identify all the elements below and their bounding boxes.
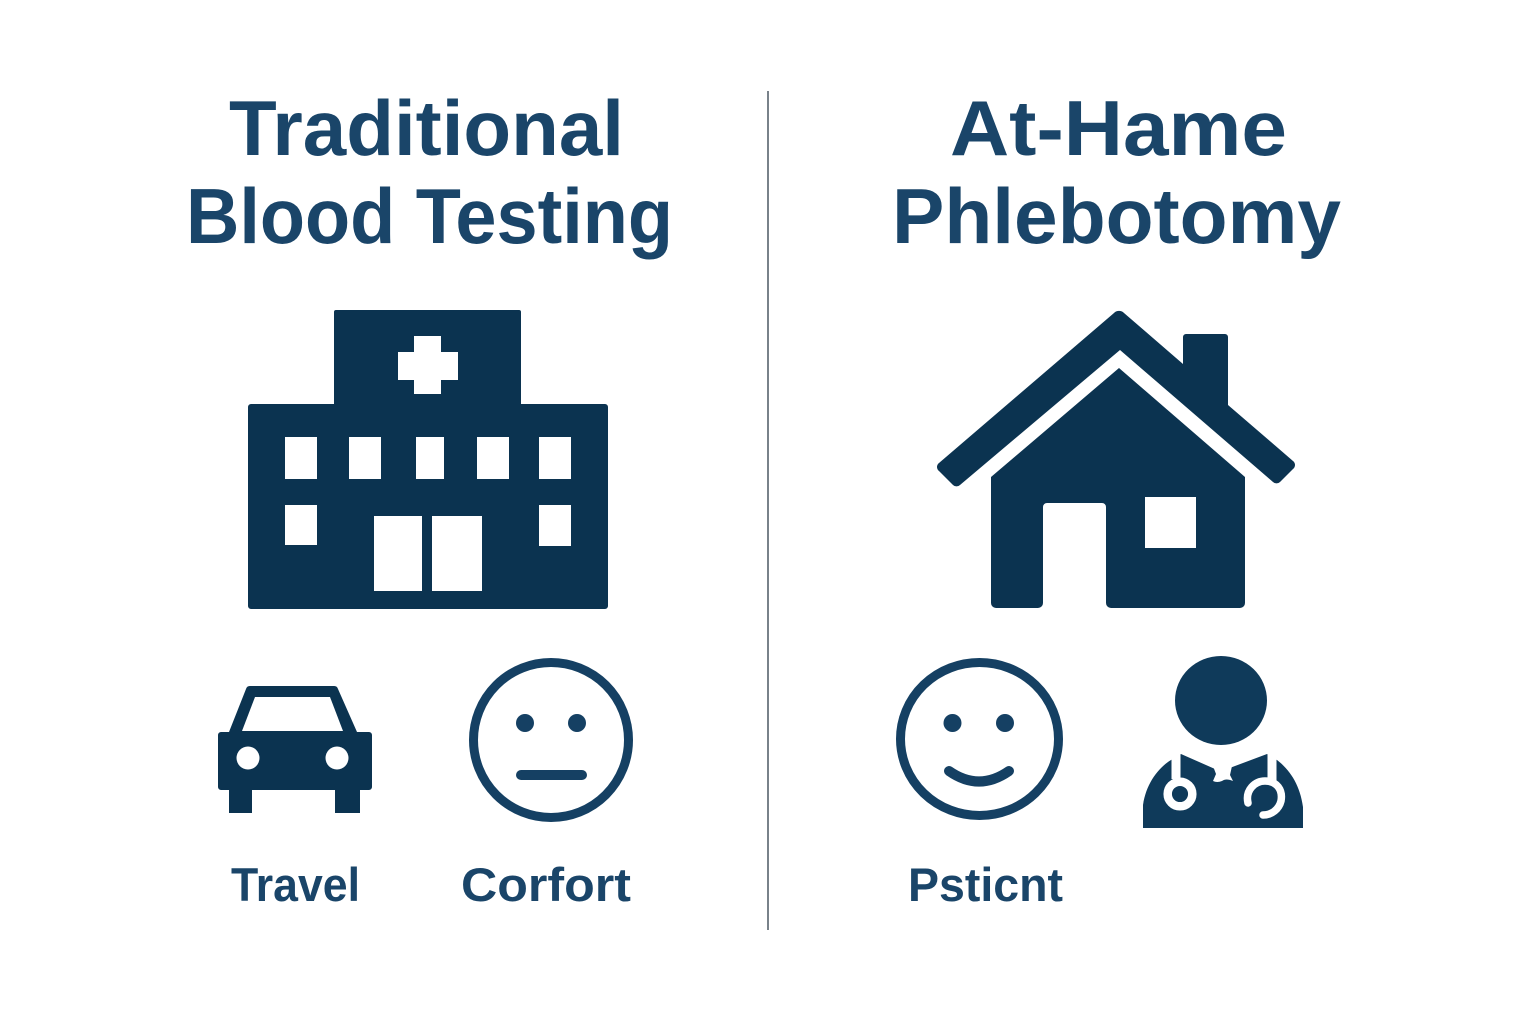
label: comfort: Corfort xyxy=(461,858,631,911)
heading: traditional blood testing: Traditional xyxy=(229,84,624,172)
heading: traditional blood testing xyxy=(186,84,673,260)
heading: at-home phlebotomy: At-Hame xyxy=(950,84,1287,172)
label: patient: Psticnt xyxy=(908,858,1063,911)
label: travel: Travel xyxy=(231,858,360,911)
icon: doctor with stethoscope xyxy=(1143,656,1303,828)
panel: traditional blood testing xyxy=(186,84,673,911)
icon: car xyxy=(218,686,372,813)
panel: at-home phlebotomy xyxy=(892,84,1341,911)
icon: hospital xyxy=(248,310,608,609)
icon: happy face xyxy=(900,662,1058,816)
icon: house xyxy=(937,311,1295,608)
icon: neutral face xyxy=(474,662,628,818)
heading: traditional blood testing: Blood Testing xyxy=(186,172,673,260)
heading: at-home phlebotomy: Phlebotomy xyxy=(892,172,1341,260)
heading: at-home phlebotomy xyxy=(892,84,1341,260)
